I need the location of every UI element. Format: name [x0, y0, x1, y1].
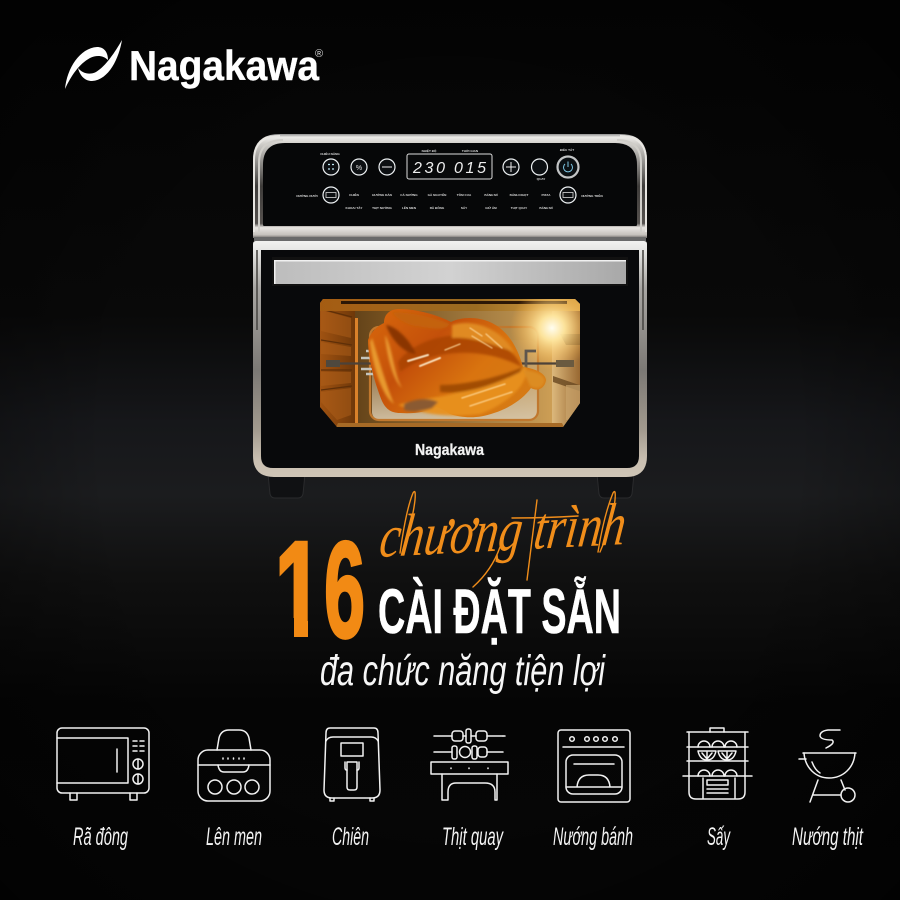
control panel buttons and display: ĐIỀU TẮT [560, 147, 574, 152]
label: Sấy [707, 823, 731, 851]
label: Nướng bánh [553, 823, 633, 851]
control panel buttons and display: THỜI GIAN [462, 148, 479, 153]
control panel buttons and display: THỊT QUAY [511, 206, 528, 210]
rotisserie spit [326, 351, 574, 374]
control panel buttons and display: BÁNH MÌ [539, 205, 553, 210]
label: Thịt quay [442, 823, 504, 851]
headline block [275, 491, 630, 695]
left wall [318, 297, 355, 429]
temperature and time display: 230 [412, 160, 445, 177]
logo: Nagakawa [65, 40, 323, 89]
chicken highlights [408, 328, 512, 406]
temperature and time display: 015 [454, 160, 486, 177]
label: Rã đông [73, 823, 128, 851]
control panel buttons and display: CHIÊN [349, 192, 360, 197]
floor [336, 423, 564, 427]
right wall [552, 297, 582, 429]
decorative script flourishes [400, 492, 615, 587]
oven ceiling [320, 299, 580, 311]
control panel buttons and display: TÔM CUA [457, 192, 472, 197]
power button [558, 156, 578, 178]
icon: logo swoosh [65, 40, 122, 89]
icon: air fryer (Chiên) [324, 728, 380, 801]
door brand label: Nagakawa [415, 442, 484, 459]
control panel housing [253, 134, 647, 241]
oven window with roast chicken [320, 299, 580, 427]
control panel buttons and display: SẤY [461, 206, 468, 210]
control panel buttons and display [296, 147, 603, 210]
icon: oven (Nướng bánh) [558, 730, 630, 802]
feature row [57, 728, 864, 851]
control panel buttons and display: GIỮ ẤM [485, 205, 497, 210]
icon: rotisserie grill (Thịt quay) [431, 729, 508, 800]
roast chicken [368, 309, 546, 417]
temperature and time display [407, 154, 492, 179]
oven product image [253, 134, 647, 498]
registered mark: ® [315, 48, 323, 60]
heat glow [514, 299, 580, 362]
control panel buttons and display: PIZZA [542, 193, 551, 197]
script heading: chương trình [376, 491, 630, 587]
icon: food dehydrator (Sấy) [683, 728, 752, 799]
control panel buttons and display: NƯỚNG DƯỚI [296, 193, 318, 198]
digit 1: 1 [275, 514, 322, 667]
heading: cài đặt sẵn: CÀI ĐẶT SẴN [378, 576, 621, 647]
chicken shading [370, 312, 545, 416]
icon: microwave (Rã đông) [57, 728, 149, 800]
control panel buttons and display: LÊN MEN [402, 205, 417, 210]
label: Lên men [206, 823, 262, 851]
lower back wall light [372, 340, 537, 420]
oven rack [370, 327, 538, 420]
oven door frame [253, 241, 647, 477]
digit 6: 6 [324, 514, 365, 667]
subheading: đa chức năng tiện lợi [320, 647, 606, 695]
icon: kettle grill (Nướng thịt) [799, 730, 856, 802]
control panel buttons and display: CÁ NƯỚNG [400, 192, 418, 197]
script heading: chương trình: chương trình [376, 491, 630, 571]
icon: fermenter (Lên men) [198, 730, 270, 801]
door handle bar [272, 257, 628, 286]
control panel buttons and display: NHIỆT ĐỘ [422, 148, 437, 153]
control panel buttons and display: KHOAI TÂY [345, 205, 363, 210]
number 16 [280, 540, 364, 640]
control panel buttons and display: GÀ NGUYÊN [428, 192, 447, 197]
logo wordmark: Nagakawa [129, 42, 320, 89]
control panel buttons and display: % [356, 165, 362, 172]
control panel buttons and display: NƯỚNG TRÊN [581, 193, 603, 198]
oven feet [268, 474, 634, 498]
control panel buttons and display: QUAY [537, 177, 546, 181]
control panel buttons and display: HƯỚNG DẪN [372, 192, 393, 197]
control panel buttons and display: THỊT NƯỚNG [372, 205, 392, 210]
label: Chiên [332, 823, 369, 851]
control panel buttons and display: CHIỀU NĂNG [320, 151, 340, 156]
control panel buttons and display: BÁNH NGỌT [510, 192, 528, 197]
control panel buttons and display: BÁNH MÌ [484, 192, 498, 197]
control panel buttons and display: RÃ ĐÔNG [430, 205, 445, 210]
